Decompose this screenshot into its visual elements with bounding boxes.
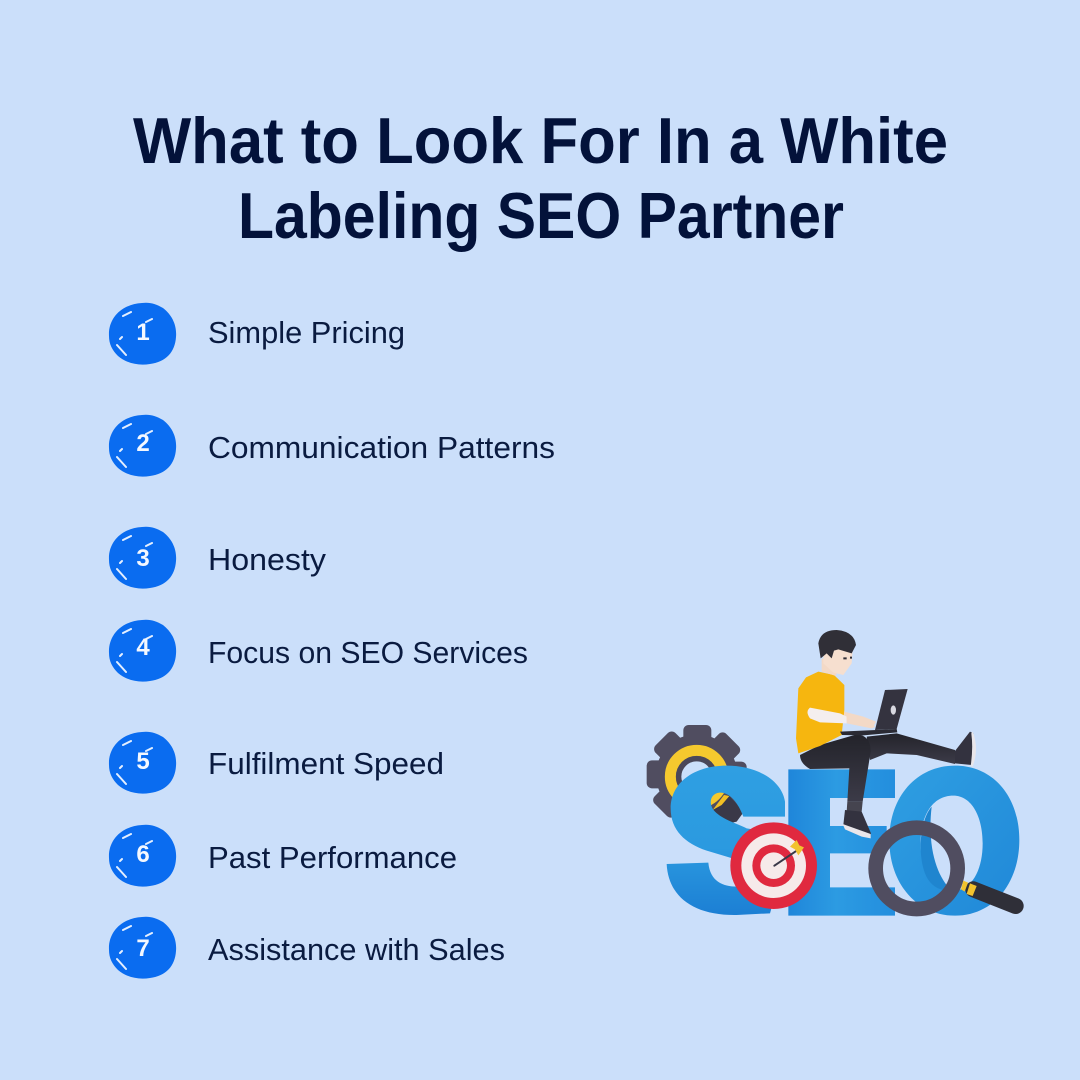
title: Labeling SEO Partner: [238, 179, 844, 252]
list item 2: Communication Patterns: 2: [136, 430, 150, 457]
near trouser cuff: [847, 802, 863, 812]
letter E: [788, 769, 895, 916]
letter S: [667, 766, 787, 915]
far leg: [867, 733, 955, 764]
person: [796, 630, 976, 838]
list item 3: Honesty: [109, 527, 327, 589]
list item 7: Assistance with Sales: 7: [136, 935, 150, 962]
list item 4: Focus on SEO Services: 4: [136, 634, 150, 661]
list item 1: Simple Pricing: Simple Pricing: [208, 315, 405, 350]
icon: magnifying glass: [876, 828, 1016, 909]
title: What to Look For In a White: [133, 104, 948, 177]
list item 7: Assistance with Sales: Assistance with Sales: [208, 932, 505, 967]
near shoe: [843, 810, 871, 837]
list item 6: Past Performance: [109, 825, 457, 887]
title: [133, 104, 948, 252]
list item 5: Fulfilment Speed: [109, 732, 444, 794]
list item 3: Honesty: 3: [136, 545, 150, 572]
list item 1: Simple Pricing: 1: [136, 319, 150, 346]
illustration: person with laptop on SEO letters: [647, 630, 1019, 916]
far shoe: [955, 732, 973, 765]
list item 6: Past Performance: Past Performance: [208, 840, 457, 875]
list item 5: Fulfilment Speed: Fulfilment Speed: [208, 746, 444, 781]
list item 4: Focus on SEO Services: [109, 620, 528, 682]
letter O: [889, 766, 1019, 916]
list item 6: Past Performance: 6: [136, 841, 150, 868]
shirt: [796, 672, 844, 753]
neck and head: [822, 658, 838, 676]
list item 7: Assistance with Sales: [109, 917, 505, 979]
icon: target with dart: [730, 822, 817, 909]
icon: gear: [647, 725, 747, 825]
list item 3: Honesty: Honesty: [208, 542, 327, 577]
laptop: [875, 689, 908, 730]
list item 4: Focus on SEO Services: Focus on SEO Services: [208, 635, 528, 670]
arm: [807, 708, 847, 723]
list item 2: Communication Patterns: [109, 415, 555, 477]
list item 2: Communication Patterns: Communication Patterns: [208, 430, 555, 465]
far arm: [842, 711, 876, 727]
list item 1: Simple Pricing: [109, 303, 405, 365]
list item 5: Fulfilment Speed: 5: [136, 748, 150, 775]
near leg: [800, 734, 871, 802]
hair: [818, 630, 856, 658]
face details: [843, 657, 852, 659]
